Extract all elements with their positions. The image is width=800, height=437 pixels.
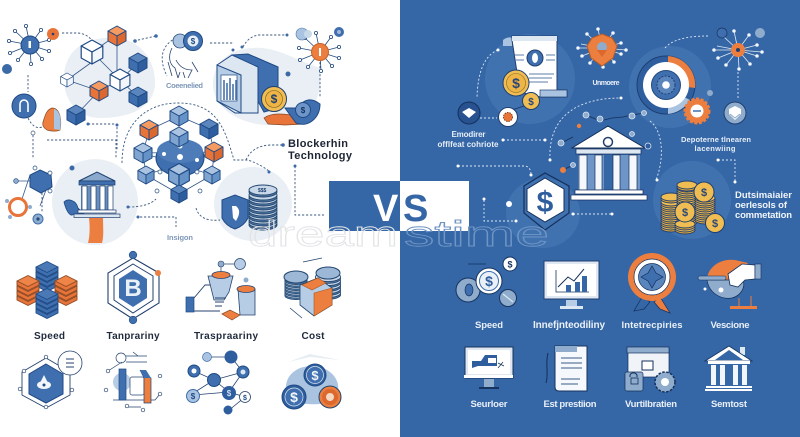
text: left caption: offlfeat cohriote	[438, 140, 499, 149]
icon: coin network: $	[243, 395, 247, 402]
text: sixth label: Est prestiion	[544, 399, 597, 410]
background blobs	[485, 34, 731, 248]
icon: document with coins: $	[512, 75, 520, 91]
icon: donut gauge with gear	[637, 56, 713, 123]
text: middle-right caption: lacenwiing	[694, 144, 736, 153]
icon: hexagon dollar	[524, 173, 569, 230]
icon: block cubes cluster	[61, 26, 147, 125]
text: tanprariny label: Tanprariny	[106, 331, 160, 342]
panel: right blue background	[400, 0, 800, 437]
icon: hex and ring nodes	[5, 166, 52, 224]
text: centralised label: Coeenelied	[166, 81, 203, 90]
icon: book and circuit	[104, 352, 162, 412]
icon: small nodes around bank	[558, 110, 651, 173]
icon: shield and coin stack: $$$	[258, 188, 267, 194]
icon: coin network: $	[227, 389, 232, 398]
text: speed label: Speed	[34, 331, 65, 342]
heading: blockchain technology	[288, 138, 353, 162]
callout: VS badge	[329, 181, 469, 231]
text: speed label: Speed	[475, 320, 503, 331]
icon: speed coins: $	[485, 273, 493, 289]
icon: gold coin stacks: $	[682, 207, 688, 219]
panel: right icon grid	[456, 253, 761, 410]
icon: paper document	[546, 346, 587, 391]
callout: VS badge: V	[373, 188, 399, 230]
watermark	[248, 213, 549, 254]
icon: cloud with coins: $	[311, 368, 319, 383]
icon: eye hexagon with speech bubble	[18, 351, 82, 409]
panel: right top diagram	[438, 28, 792, 248]
dashed connectors	[458, 36, 738, 221]
text: eighth label: Semtost	[711, 399, 748, 410]
callout: VS badge: S	[403, 188, 428, 230]
icon: central blockchain network	[134, 106, 223, 203]
icon: server with coins and hand: $	[271, 92, 278, 106]
text: fifth label: Seurloer	[470, 399, 508, 410]
text: uncover label: Unmoere	[592, 80, 620, 87]
icon: bank building	[571, 126, 647, 200]
icon: light shield circle	[724, 102, 746, 124]
icon: speed coins	[456, 257, 517, 306]
text: fourth label: Vescione	[710, 320, 750, 331]
text: left caption	[438, 130, 499, 149]
icon: top-right network node	[296, 27, 344, 73]
icon: shield and coin stack	[222, 185, 277, 230]
icon: cost coins and box	[284, 258, 341, 318]
text: insight label: Insigon	[167, 233, 193, 242]
watermark: stime	[404, 213, 549, 254]
text: right caption: commetation	[735, 210, 792, 221]
icon: document with coins	[498, 36, 567, 126]
icon: coin network: $	[191, 392, 196, 401]
icon: bitcoin hexagon: B	[124, 275, 142, 302]
panel: left top diagram	[2, 24, 353, 245]
icon: orange node network	[713, 28, 765, 70]
text: right caption: oerlesols of	[735, 200, 788, 211]
text: seventh label: Vurtilbratien	[625, 399, 677, 410]
icon: person with coin: $	[191, 37, 196, 46]
heading: blockchain technology: Technology	[288, 150, 353, 162]
icon: envelope badge	[458, 102, 480, 124]
icon: orange shield circuit	[577, 28, 627, 68]
text: right caption: Dutsimaiaier	[735, 190, 792, 201]
icon: speed coins: $	[507, 260, 513, 270]
icon: gold coin stacks: $	[701, 187, 707, 199]
text: middle-right caption: Depoterne tlnearen	[681, 135, 751, 144]
icon: server with coins and hand: $	[301, 106, 306, 115]
icon: server with coins and hand	[217, 54, 320, 125]
text: second label: Innefjnteodiliny	[533, 320, 605, 331]
text: third label: Intetrecpiries	[622, 320, 682, 331]
icon: blob dots	[70, 34, 296, 218]
icon: bank small	[705, 346, 752, 391]
panel: left icon grid	[17, 251, 341, 414]
icon: cloud with coins: $	[290, 389, 298, 405]
icon: desktop screen	[464, 347, 513, 389]
icon: calendar with lock and gear	[625, 347, 675, 392]
icon: monitor with chart	[544, 261, 599, 309]
background blobs	[52, 38, 320, 245]
icon: cloud with coins	[282, 354, 341, 409]
watermark: dream	[248, 213, 398, 254]
panel: left white background	[0, 0, 400, 437]
dashed connectors	[28, 33, 324, 227]
heading: blockchain technology: Blockerhin	[288, 138, 348, 150]
text: transparency label: Traspraariny	[194, 331, 258, 342]
icon: gold coin stacks: $	[712, 218, 718, 230]
icon: top-left network node	[2, 24, 59, 74]
icon: person with coin	[168, 32, 202, 78]
icon: transparency hand	[186, 258, 255, 320]
icon: bank on hand	[64, 172, 120, 243]
icon: bitcoin hexagon	[108, 251, 161, 324]
text: left caption: Emodirer	[452, 130, 486, 139]
text: cost label: Cost	[302, 331, 325, 342]
icon: document with coins: $	[528, 97, 534, 108]
icon: coin network	[186, 350, 250, 414]
icon: award badge	[628, 253, 676, 313]
icon: speed stacks	[17, 262, 77, 318]
text: middle-right caption	[681, 135, 751, 153]
icon: hexagon dollar: $	[537, 186, 554, 219]
text: right caption	[735, 190, 792, 221]
icon: dashed connector dots	[456, 48, 736, 222]
icon: orange head with keyhole badge	[12, 94, 61, 135]
icon: handshake	[698, 260, 761, 309]
icon: gold coin stacks	[661, 181, 724, 234]
